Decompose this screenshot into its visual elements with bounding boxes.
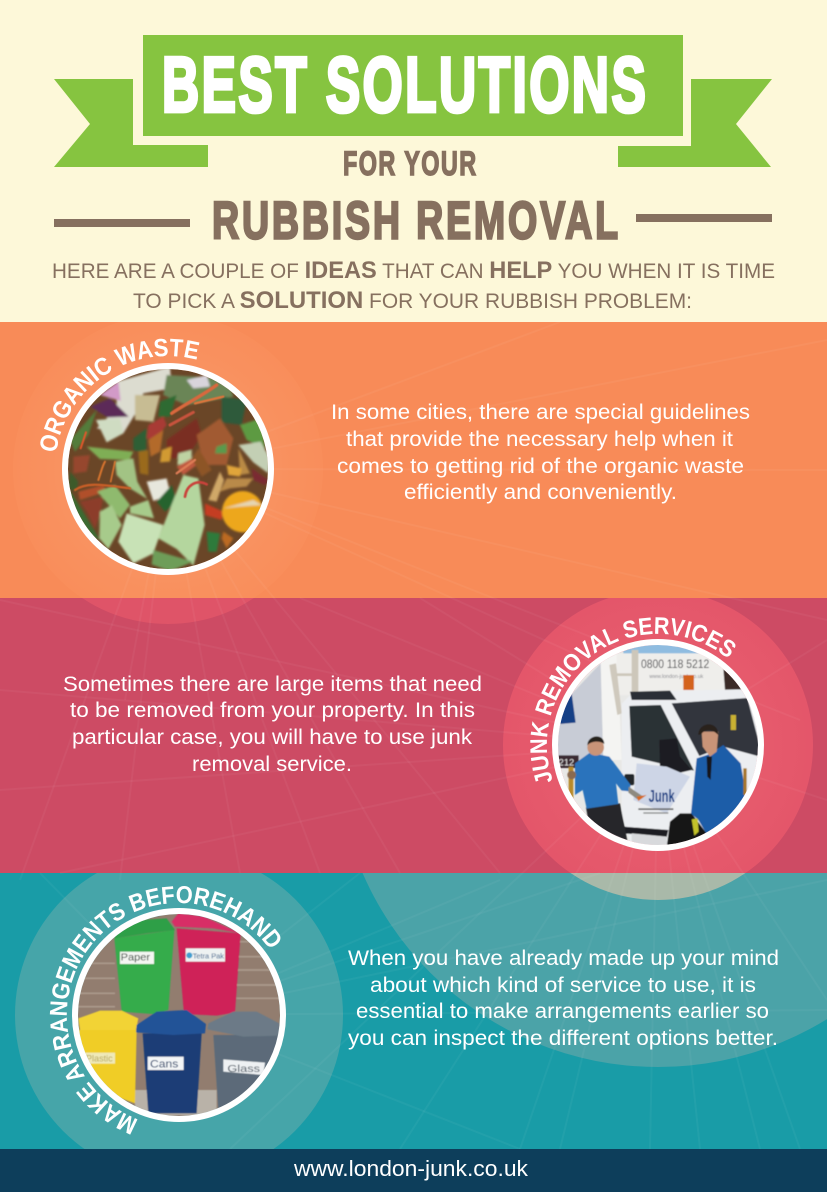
- junk logo: Junk: [649, 786, 675, 806]
- intro text: HERE ARE A COUPLE OF IDEAS THAT CAN HELP YOU WHEN IT IS TIME: [52, 257, 775, 284]
- photo ring: [75, 911, 283, 1119]
- ribbon left tail: [54, 79, 208, 167]
- intro text: [52, 257, 775, 314]
- grey bin: Glass: [227, 1064, 260, 1075]
- title: best solutions: BEST SOLUTIONS: [162, 42, 646, 129]
- green bin: [113, 918, 175, 1014]
- curved label: junk removal services: JUNK REMOVAL SERVICES: [530, 617, 736, 782]
- blue bin: [136, 1010, 206, 1113]
- van cab: [622, 689, 763, 847]
- text: arrangements description: When you have already made up your mind: [348, 946, 779, 970]
- grey bin: [207, 1012, 280, 1110]
- photo: junk removal van and crew: www.london-junk.co.uk: [649, 674, 704, 680]
- panel: arrangements background: [0, 873, 827, 1149]
- panel: organic waste background: [0, 322, 827, 598]
- ribbon main band: [143, 35, 683, 136]
- text: junk removal description: [63, 672, 482, 776]
- text: organic waste description: comes to getting rid of the organic waste: [337, 454, 744, 478]
- curved label: make arrangements beforehand: MAKE ARRANGEMENTS BEFOREHAND: [50, 886, 280, 1135]
- background rays: [20, 624, 800, 1149]
- green bin: Paper: [121, 953, 151, 964]
- right crew member: [691, 745, 746, 834]
- text: junk removal description: removal service.: [192, 752, 352, 776]
- heading rule right: [636, 214, 772, 222]
- panel: make arrangements beforehand: [50, 886, 286, 1135]
- text: organic waste description: In some cities, there are special guidelines: [331, 400, 750, 424]
- photo ring: [65, 366, 271, 572]
- text: junk removal description: to be removed from your property. In this: [70, 698, 475, 722]
- background: cream header: [0, 0, 827, 322]
- curved label: organic waste: ORGANIC WASTE: [40, 338, 200, 451]
- panel: organic waste: [40, 338, 274, 575]
- pink bin: [172, 913, 241, 1016]
- background halos: [13, 314, 827, 1179]
- text: junk removal description: particular case, you will have to use junk: [72, 725, 472, 749]
- yellow bin: [77, 1011, 138, 1103]
- heading rule left: [54, 219, 190, 227]
- photo: organic waste food scraps: [68, 369, 268, 569]
- ribbon right tail: [618, 79, 772, 167]
- yellow bin: Plastic: [86, 1054, 113, 1064]
- photo ring: [555, 642, 761, 848]
- panel: junk removal services: [530, 617, 764, 851]
- text: arrangements description: you can inspect the different options better.: [348, 1026, 778, 1050]
- sky: [622, 645, 698, 654]
- van box: [553, 663, 603, 760]
- photo: junk removal van and crew: [558, 645, 758, 845]
- text: junk removal description: Sometimes there are large items that need: [63, 672, 482, 696]
- panel: junk removal background: [0, 598, 827, 873]
- footer url: www.london-junk.co.uk: [293, 1156, 529, 1181]
- left crew member: [586, 803, 627, 841]
- photo: junk removal van and crew: 0800 118 5212: [641, 657, 710, 671]
- heading: for your: FOR YOUR: [343, 146, 476, 183]
- text: arrangements description: [348, 946, 779, 1050]
- pink bin: Tetra Pak: [193, 951, 224, 960]
- photo: recycling bins: [78, 914, 280, 1116]
- text: organic waste description: that provide the necessary help when it: [346, 427, 733, 451]
- intro text: TO PICK A SOLUTION FOR YOUR RUBBISH PROBLEM:: [133, 287, 692, 314]
- text: organic waste description: [331, 400, 750, 504]
- text: organic waste description: efficiently and conveniently.: [404, 480, 677, 504]
- heading: rubbish removal: RUBBISH REMOVAL: [212, 190, 618, 250]
- blue bin: Cans: [150, 1058, 179, 1070]
- banner: green ribbon: [54, 35, 772, 167]
- text: arrangements description: essential to make arrangements earlier so: [356, 999, 769, 1023]
- footer bar: [0, 1149, 827, 1192]
- photo: junk removal van and crew: 212: [559, 757, 574, 767]
- text: arrangements description: about which kind of service to use, it is: [370, 973, 756, 997]
